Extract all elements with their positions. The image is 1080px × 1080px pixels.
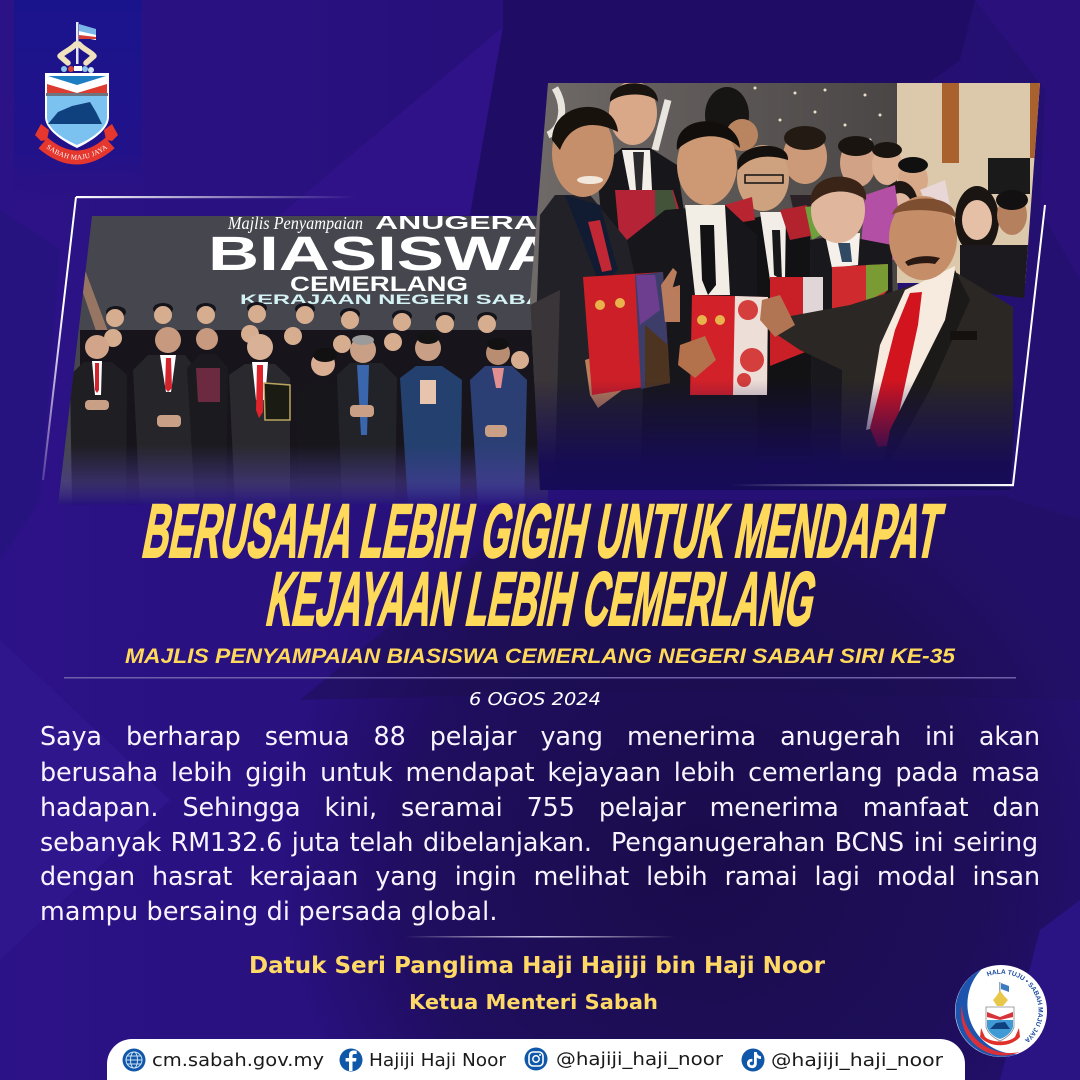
paragraph line 4: sebanyak RM132.6 juta telah dibelanjakan. Penganugerahan BCNS ini seiring <box>40 827 1038 857</box>
headline <box>137 490 949 642</box>
icon: facebook <box>340 1048 362 1072</box>
badge disc <box>955 965 1047 1057</box>
hall wall and dark backdrop <box>530 83 1042 383</box>
badge swoosh <box>955 969 1020 1057</box>
backdrop banner text: BIASISWA <box>208 228 558 281</box>
left photo: award ceremony group <box>50 213 560 506</box>
backdrop streak <box>83 272 108 330</box>
left photo bottom fade <box>58 450 548 505</box>
student second-row right <box>725 145 820 460</box>
back row students <box>705 87 1040 300</box>
stage backdrop <box>50 216 550 506</box>
tiktok text: @hajiji_haji_noor <box>771 1050 944 1071</box>
paragraph line 5: dengan hasrat kerajaan yang ingin melihat lebih ramai lagi modal insan <box>40 861 1040 891</box>
paragraph line 3: hadapan. Sehingga kini, seramai 755 pelajar menerima manfaat dan <box>40 792 1040 822</box>
paragraph line 2: berusaha lebih gigih untuk mendapat kejayaan lebih cemerlang pada masa <box>40 757 1040 787</box>
signatory title: Ketua Menteri Sabah <box>409 990 658 1014</box>
Chief Minister <box>760 196 1013 490</box>
red award folder rear <box>770 277 823 366</box>
icon: tiktok <box>742 1048 764 1072</box>
student left smiling <box>530 107 680 490</box>
red award folder centre <box>678 295 768 395</box>
badge crest <box>980 982 1020 1045</box>
subtitle: MAJLIS PENYAMPAIAN BIASISWA CEMERLANG NEGERI SABAH SIRI KE-35 <box>125 644 956 668</box>
backdrop banner text <box>212 216 536 304</box>
footer social bar <box>107 1039 965 1080</box>
white frame left photo <box>43 196 356 480</box>
Hala Tuju badge <box>955 965 1047 1057</box>
signatory name: Datuk Seri Panglima Haji Hajiji bin Haji Noor <box>249 953 826 979</box>
website text: cm.sabah.gov.my <box>152 1050 324 1071</box>
crest shield <box>45 73 109 148</box>
footer pill <box>107 1039 965 1080</box>
crest scroll: SABAH MAJU JAYA <box>46 144 108 160</box>
icon: instagram <box>524 1048 548 1070</box>
badge ring text: HALA TUJU • SABAH MAJU JAYA <box>986 969 1044 1042</box>
facebook text: Hajiji Haji Noor <box>369 1050 507 1071</box>
strip behind crest <box>14 0 142 205</box>
instagram text: @hajiji_haji_noor <box>556 1049 724 1070</box>
crest arms <box>60 44 94 63</box>
student centre <box>627 121 743 460</box>
backdrop banner text: ANUGERAH <box>375 213 560 233</box>
crest flag <box>76 22 96 64</box>
icon: website globe <box>122 1048 146 1072</box>
front row dignitaries <box>70 327 527 505</box>
back row students <box>80 302 550 505</box>
red award folder left <box>583 268 680 395</box>
crest beads <box>61 66 94 73</box>
backdrop banner text: CEMERLANG <box>290 273 468 296</box>
Sabah state crest <box>35 22 118 164</box>
paragraph line 6: mampu bersaing di persada global. <box>40 896 498 926</box>
backdrop banner text: KERAJAAN NEGERI SABAH <box>240 291 560 307</box>
date: 6 OGOS 2024 <box>469 690 601 710</box>
student with glasses and tie, back left <box>598 83 684 240</box>
backdrop banner text: Majlis Penyampaian <box>227 213 363 233</box>
paragraph line 1: Saya berharap semua 88 pelajar yang menerima anugerah ini akan <box>40 721 1040 751</box>
right photo bottom fade <box>536 383 1016 490</box>
white frame right photo <box>730 205 1045 486</box>
right photo: Chief Minister with students <box>525 81 1045 492</box>
student fair right <box>810 177 895 480</box>
